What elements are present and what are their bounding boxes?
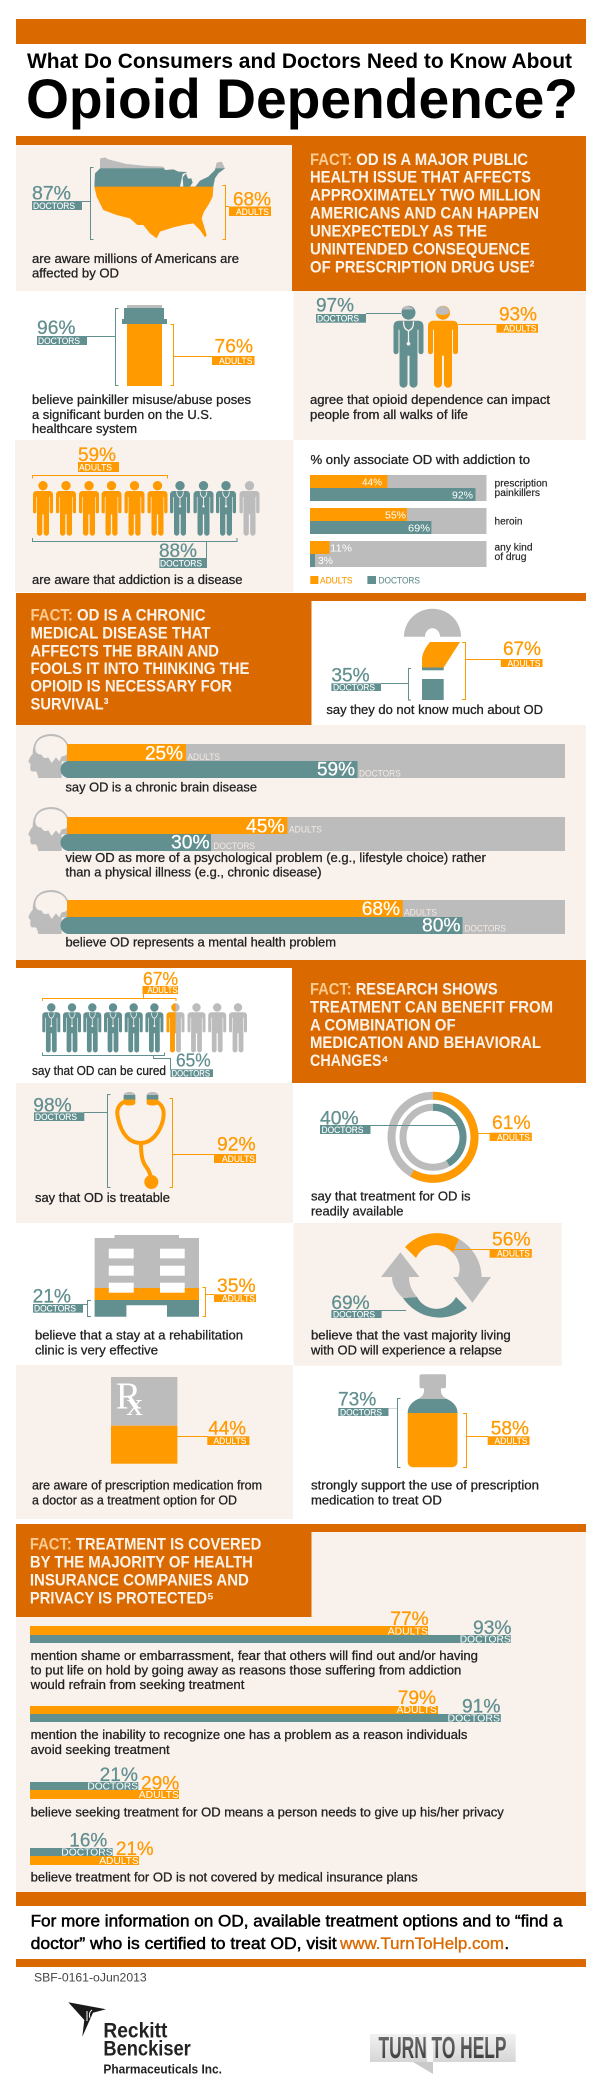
adults 67%: ADULTS — [508, 658, 541, 668]
panel: OD is treatable — [16, 1083, 293, 1223]
adults 76% — [212, 336, 254, 366]
fact text: HEALTH ISSUE THAT AFFECTS — [310, 169, 531, 187]
bar row: psychological problem — [28, 807, 565, 879]
bar row: mental health problem — [28, 890, 565, 950]
panel: fact three — [292, 960, 586, 1083]
bar row: not covered by insurance: believe treatment for OD is not covered by medical insurance plans — [31, 1871, 418, 1885]
adults 92% — [214, 1134, 256, 1164]
doctors 65% — [170, 1051, 213, 1078]
caption: with OD will experience a relapse — [310, 1343, 502, 1357]
panel: treatment readily available — [311, 1096, 532, 1218]
doctors 69%: DOCTORS — [333, 1309, 375, 1319]
bar row: mental health problem: 68% — [362, 898, 400, 920]
adults 67%: ADULTS — [148, 985, 178, 995]
adults 67%: 67% — [503, 638, 541, 660]
bar row: shame or embarrassment: DOCTORS — [460, 1634, 511, 1646]
fact text: FACT: OD IS A MAJOR PUBLIC — [310, 151, 528, 169]
caption: believe that the vast majority living — [311, 1329, 511, 1343]
doctors 96%: 96% — [37, 317, 76, 339]
doctors 96% — [37, 317, 87, 346]
adults 61%: ADULTS — [497, 1132, 530, 1142]
fact text — [30, 606, 250, 714]
adults 56%: 56% — [492, 1229, 531, 1251]
title line two: Opioid Dependence? — [26, 67, 578, 130]
caption: agree that opioid dependence can impact — [310, 393, 551, 407]
bar row: not covered by insurance: 21% — [116, 1838, 154, 1860]
fact text — [310, 980, 553, 1070]
adults 92%: ADULTS — [222, 1154, 255, 1164]
doctors 35%: DOCTORS — [333, 682, 375, 692]
doctors 88%: DOCTORS — [160, 558, 202, 568]
doctors 88% — [159, 540, 207, 568]
fact text: FACT: RESEARCH SHOWS — [310, 980, 498, 998]
icon: medicine bottle — [408, 1374, 458, 1467]
bar row: shame or embarrassment: ADULTS — [388, 1625, 428, 1637]
adults 67%: 67% — [143, 969, 178, 989]
fact four: INSURANCE COMPANIES AND — [30, 1571, 249, 1589]
bars: prescription painkillers: 92% — [452, 490, 473, 502]
fact text: AMERICANS AND CAN HAPPEN — [310, 204, 539, 222]
icon: pill bottle — [122, 305, 167, 386]
icon: Rx pad: x — [126, 1387, 143, 1423]
fact text: FOOLS IT INTO THINKING THE — [30, 660, 250, 678]
bar row: mental health problem: believe OD represents a mental health problem — [66, 936, 336, 950]
bars: any kind of drug: 11% — [330, 542, 352, 554]
adults 68%: ADULTS — [236, 207, 269, 217]
bars: heroin — [310, 508, 522, 535]
logo: Turn to Help — [370, 2030, 516, 2074]
call to action text — [31, 1913, 563, 1953]
adults 61% — [490, 1112, 532, 1142]
caption: say that OD is treatable — [35, 1191, 170, 1205]
bar row: inability to recognize: 91% — [462, 1696, 500, 1718]
bar row: psychological problem: 45% — [246, 815, 285, 837]
fact text — [310, 151, 540, 276]
adults 67% — [501, 638, 542, 668]
adults 44%: 44% — [208, 1417, 246, 1439]
bar row: give up privacy: DOCTORS — [87, 1780, 138, 1792]
doctors 87%: DOCTORS — [33, 201, 75, 211]
panel: relapse — [294, 1223, 562, 1366]
bar row: give up privacy: 29% — [141, 1772, 179, 1794]
adults 68% — [229, 188, 271, 217]
doctors 21%: 21% — [33, 1286, 71, 1308]
icon: clinic building — [95, 1235, 199, 1317]
doctors 40%: 40% — [320, 1107, 359, 1129]
icon: double ring chart — [392, 1096, 475, 1179]
panel: prescription treatment awareness — [16, 1365, 293, 1519]
logo: Reckitt Benckiser: Benckiser — [103, 2038, 191, 2061]
bar row: chronic brain disease: ADULTS — [187, 752, 220, 763]
adults 58%: ADULTS — [494, 1436, 528, 1446]
panel: OD can be cured — [32, 969, 247, 1078]
icon: arrow mark — [68, 2002, 106, 2037]
adults 59%: ADULTS — [79, 462, 112, 472]
legend: ADULTS — [320, 576, 352, 587]
call to action text: . — [504, 1935, 509, 1953]
caption: are aware that addiction is a disease — [32, 573, 243, 587]
caption: believe that a stay at a rehabilitation — [35, 1329, 243, 1343]
panel: associate OD with addiction bar chart — [310, 453, 548, 587]
bar row: inability to recognize: avoid seeking treatment — [31, 1743, 170, 1757]
adults 56% — [490, 1229, 532, 1259]
icon: doctor and adult figures — [394, 306, 458, 388]
caption: people from all walks of life — [310, 408, 468, 422]
call to action text: doctor” who is certified to treat OD, visit — [31, 1935, 337, 1953]
caption: strongly support the use of prescription — [311, 1479, 539, 1493]
fact four: BY THE MAJORITY OF HEALTH — [30, 1553, 253, 1571]
doctors 96%: DOCTORS — [38, 336, 80, 346]
bars: heroin: 55% — [385, 510, 406, 522]
bar row: chronic brain disease: say OD is a chronic brain disease — [66, 781, 257, 795]
fact text: TREATMENT CAN BENEFIT FROM — [310, 998, 553, 1016]
caption: medication to treat OD — [311, 1493, 442, 1507]
panel: map of Americans affected — [16, 145, 292, 291]
bar row: shame or embarrassment: would refrain from seeking treatment — [30, 1678, 245, 1692]
bars: prescription painkillers: painkillers — [494, 488, 540, 499]
icon: Rx pad — [111, 1375, 177, 1464]
icon: row of ten figures — [42, 1003, 247, 1052]
adults 93%: ADULTS — [504, 324, 537, 334]
fact text: UNINTENDED CONSEQUENCE — [310, 240, 530, 258]
doctors 87%: 87% — [32, 182, 71, 204]
bars: any kind of drug: of drug — [494, 552, 526, 563]
bar row: shame or embarrassment: 77% — [390, 1608, 429, 1630]
doctors 69% — [331, 1292, 382, 1319]
footer top bar — [16, 1892, 586, 1906]
bar row: shame or embarrassment: to put life on hold by going away as reasons those suffering from addiction — [31, 1664, 461, 1678]
fact text: CHANGES⁴ — [310, 1052, 388, 1070]
doctors 73%: DOCTORS — [340, 1407, 382, 1417]
doctors 98% — [33, 1095, 84, 1122]
doctors 73%: 73% — [338, 1388, 376, 1410]
doctors 87% — [32, 182, 82, 211]
adults 35%: 35% — [217, 1275, 256, 1297]
logo: Reckitt Benckiser — [68, 2002, 222, 2076]
panel: rehabilitation clinic — [33, 1235, 256, 1357]
reference code: SBF-0161-oJun2013 — [34, 1973, 147, 1985]
bar row: mental health problem: DOCTORS — [464, 924, 506, 935]
caption: say that treatment for OD is — [311, 1190, 470, 1204]
doctors 21%: DOCTORS — [34, 1304, 76, 1314]
bar row: not covered by insurance: DOCTORS — [61, 1846, 113, 1858]
fact four — [16, 1524, 312, 1617]
panel: brain disease bars — [16, 725, 586, 960]
icon: row of ten figures — [33, 481, 260, 536]
caption: affected by OD — [32, 267, 119, 281]
fact text: UNEXPECTEDLY AS THE — [310, 222, 487, 240]
bars: prescription painkillers: 44% — [362, 477, 382, 489]
doctors 35%: 35% — [331, 665, 370, 687]
doctors 98%: 98% — [33, 1095, 72, 1117]
bar row: inability to recognize: mention the inability to recognize one has a problem as a reason individuals — [31, 1728, 467, 1742]
bars: prescription painkillers: prescription — [494, 479, 548, 490]
panel: do not know much about OD — [326, 609, 543, 717]
section bar — [16, 136, 586, 145]
icon: stethoscope — [117, 1092, 164, 1189]
doctors 97%: 97% — [316, 295, 354, 317]
bars: prescription painkillers — [310, 475, 548, 502]
bar row: not covered by insurance — [30, 1830, 418, 1885]
logo: Reckitt Benckiser: Reckitt — [103, 2020, 167, 2043]
caption: a doctor as a treatment option for OD — [32, 1493, 237, 1507]
fact text: AFFECTS THE BRAIN AND — [30, 642, 219, 660]
footer bottom bar — [16, 1959, 586, 1967]
bar row: give up privacy: 21% — [100, 1764, 138, 1786]
call to action text: www.TurnToHelp.com — [339, 1935, 504, 1953]
adults 76%: ADULTS — [219, 356, 253, 366]
bar row: chronic brain disease — [28, 734, 565, 795]
panel: support prescription medication — [311, 1374, 539, 1507]
panel: addiction is a disease — [15, 440, 294, 592]
bar row: psychological problem: 30% — [171, 832, 210, 854]
adults 92%: 92% — [217, 1134, 256, 1156]
fact text: APPROXIMATELY TWO MILLION — [310, 187, 540, 205]
bar row: inability to recognize: ADULTS — [396, 1704, 437, 1716]
caption: say that OD can be cured — [32, 1064, 166, 1078]
doctors 98%: DOCTORS — [35, 1112, 77, 1122]
doctors 21% — [33, 1286, 83, 1314]
bar row: mental health problem: 80% — [422, 914, 460, 936]
bars: any kind of drug: any kind — [494, 543, 532, 554]
bar row: not covered by insurance: ADULTS — [99, 1855, 139, 1867]
bar row: chronic brain disease: 59% — [317, 759, 355, 781]
bars: any kind of drug: 3% — [318, 555, 333, 567]
caption: readily available — [311, 1204, 403, 1218]
panel: fact one — [292, 136, 586, 291]
doctors 40%: DOCTORS — [322, 1125, 364, 1135]
doctors 65%: DOCTORS — [172, 1068, 210, 1078]
doctors 97% — [316, 295, 366, 324]
adults 59%: 59% — [78, 444, 116, 466]
adults 58%: 58% — [491, 1417, 529, 1439]
bars: heroin: heroin — [494, 517, 522, 528]
doctors 97%: DOCTORS — [317, 314, 359, 324]
logo: Reckitt Benckiser: Pharmaceuticals Inc. — [103, 2062, 222, 2076]
panel: painkiller burden — [32, 305, 254, 436]
fact four: PRIVACY IS PROTECTED⁵ — [30, 1589, 214, 1607]
doctors 69%: 69% — [331, 1292, 370, 1314]
bar row: chronic brain disease: DOCTORS — [359, 768, 401, 779]
caption: are aware of prescription medication from — [32, 1479, 262, 1493]
adults 93%: 93% — [499, 304, 537, 326]
caption: clinic is very effective — [35, 1343, 158, 1357]
doctors 88%: 88% — [159, 540, 197, 562]
bar row: psychological problem: view OD as more of a psychological problem (e.g., lifestyle choice) rather — [66, 851, 486, 865]
bar row: not covered by insurance: 16% — [69, 1830, 107, 1852]
fact text: OPIOID IS NECESSARY FOR — [30, 678, 232, 696]
caption: say they do not know much about OD — [326, 703, 543, 717]
doctors 35% — [331, 665, 381, 692]
bar row: shame or embarrassment — [30, 1608, 512, 1692]
bar row: psychological problem: than a physical illness (e.g., chronic disease) — [66, 865, 322, 879]
doctors 73% — [338, 1388, 388, 1417]
bar row: give up privacy — [30, 1764, 505, 1820]
bar row: shame or embarrassment: mention shame or embarrassment, fear that others will find out and/or having — [31, 1649, 478, 1663]
panel: treatment coverage — [16, 1524, 586, 1892]
fact four: FACT: TREATMENT IS COVERED — [30, 1536, 261, 1554]
legend: DOCTORS — [378, 576, 420, 587]
bar row: inability to recognize: DOCTORS — [448, 1713, 500, 1725]
caption: a significant burden on the U.S. — [32, 408, 212, 422]
bar row: inability to recognize — [30, 1687, 501, 1757]
adults 93% — [496, 304, 538, 334]
legend — [310, 576, 420, 587]
adults 68%: 68% — [233, 188, 271, 210]
bar row: shame or embarrassment: 93% — [473, 1617, 512, 1639]
fact text: MEDICAL DISEASE THAT — [30, 624, 210, 642]
section bar — [16, 960, 586, 968]
panel: fact two — [16, 593, 586, 726]
caption: healthcare system — [32, 422, 137, 436]
adults 76%: 76% — [214, 336, 253, 358]
icon: US map — [94, 158, 225, 238]
adults 44%: ADULTS — [214, 1436, 247, 1446]
bar row: mental health problem: ADULTS — [404, 908, 437, 919]
bars: any kind of drug — [310, 541, 532, 567]
bars: heroin: 69% — [408, 523, 430, 535]
caption: are aware millions of Americans are — [32, 252, 239, 266]
bar row: chronic brain disease: 25% — [145, 742, 183, 764]
adults 61%: 61% — [492, 1112, 531, 1134]
title — [26, 50, 578, 130]
call to action text: For more information on OD, available treatment options and to “find a — [31, 1913, 563, 1931]
adults 35%: ADULTS — [222, 1293, 255, 1303]
bar row: give up privacy: believe seeking treatment for OD means a person needs to give up his/her privacy — [31, 1806, 505, 1820]
doctors 65%: 65% — [176, 1051, 211, 1071]
bar row: psychological problem: ADULTS — [289, 825, 322, 836]
bar row: psychological problem: DOCTORS — [213, 841, 255, 852]
bar row: inability to recognize: 79% — [398, 1687, 436, 1709]
adults 56%: ADULTS — [497, 1249, 530, 1259]
fact text: OF PRESCRIPTION DRUG USE² — [310, 258, 535, 276]
panel: walks of life — [294, 291, 586, 440]
icon: Rx pad: R — [116, 1375, 142, 1417]
fact text: SURVIVAL³ — [30, 696, 109, 714]
chart heading: % only associate OD with addiction to — [310, 453, 530, 467]
icon: cycle arrows — [381, 1233, 491, 1318]
fact text: A COMBINATION OF — [310, 1016, 456, 1034]
top banner bar — [16, 19, 586, 44]
icon: question mark — [404, 609, 461, 700]
title line one: What Do Consumers and Doctors Need to Know About — [27, 50, 572, 73]
fact text: MEDICATION AND BEHAVIORAL — [310, 1034, 541, 1052]
fact text: FACT: OD IS A CHRONIC — [30, 606, 206, 624]
doctors 40% — [320, 1107, 370, 1135]
bar row: give up privacy: ADULTS — [139, 1789, 179, 1801]
caption: believe painkiller misuse/abuse poses — [32, 393, 251, 407]
